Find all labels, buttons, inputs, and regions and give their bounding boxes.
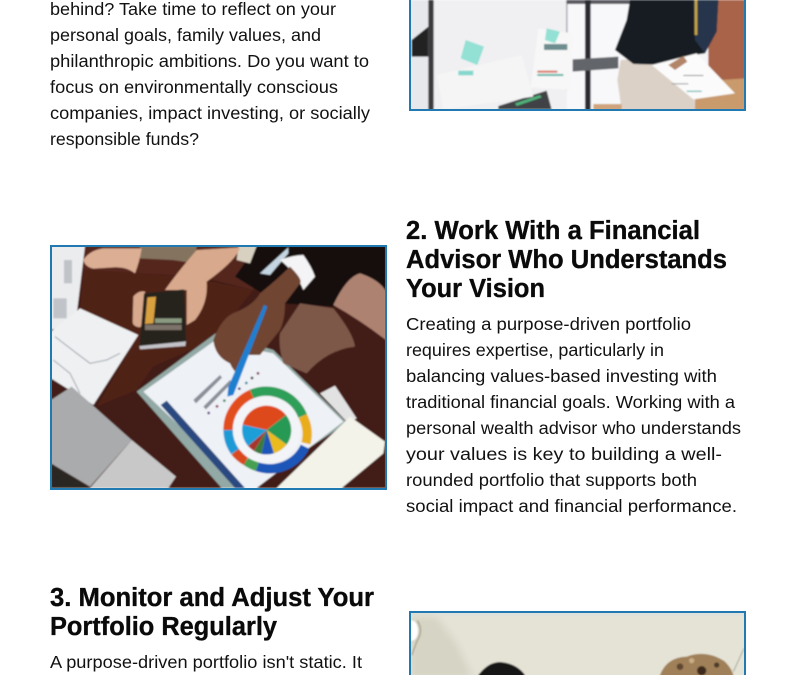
photo frame (51, 246, 386, 489)
text block: step 2 paragraph (406, 314, 741, 516)
right arm sleeve (260, 247, 288, 275)
paper in hand (652, 53, 735, 99)
legend text dots (193, 375, 232, 409)
jacket (615, 0, 718, 65)
chart sheet (51, 308, 138, 405)
text block: step 2 paragraph: traditional financial goals. Working with a (406, 392, 735, 412)
right side cushion / chair (280, 303, 355, 373)
text block: step 1 paragraph: responsible funds? (50, 129, 199, 149)
phone holding arm (165, 247, 240, 325)
donut chart (228, 391, 307, 469)
photo: two people in front of a pale wall (406, 612, 745, 675)
text block: step 1 paragraph (50, 0, 370, 149)
white papers bottom right (320, 386, 357, 423)
pen (227, 305, 267, 397)
photo frame (410, 0, 745, 110)
document top-left (51, 246, 85, 329)
curly hair (660, 654, 734, 675)
text block: step 1 paragraph: focus on environmentally conscious (50, 77, 338, 97)
text block: step 2 paragraph: balancing values-based investing with (406, 366, 717, 386)
text block: step 2 paragraph: rounded portfolio that supports both (406, 470, 697, 490)
brick wall (708, 0, 745, 82)
laptop (51, 387, 132, 487)
text block: step 2 paragraph: personal wealth advisor who understands (406, 418, 741, 438)
heading: step 3 (50, 584, 374, 641)
photo frame (410, 612, 745, 675)
writing hand (213, 267, 301, 375)
heading: step 2: Your Vision (406, 275, 545, 303)
clipboard (137, 333, 346, 488)
dark hair (478, 662, 525, 675)
text block: step 1 paragraph: philanthropic ambitions. Do you want to (50, 51, 369, 71)
trousers (617, 57, 695, 110)
heading: step 3: Portfolio Regularly (50, 613, 278, 641)
text block: step 2 paragraph: requires expertise, particularly in (406, 340, 664, 360)
photo: advisor presenting at whiteboard (410, 0, 745, 110)
text block: step 3 paragraph: A purpose-driven portfolio isn't static. It (50, 652, 362, 672)
heading: step 2: Advisor Who Understands (406, 246, 727, 274)
text block: step 1 paragraph: companies, impact investing, or socially (50, 103, 370, 123)
phone (139, 289, 186, 349)
text block: step 2 paragraph: your values is key to building a well- (406, 444, 722, 464)
photo: hands reviewing a financial chart on a table (51, 246, 386, 489)
left hand top (83, 248, 142, 273)
text block: step 2 paragraph: Creating a purpose-driven portfolio (406, 314, 691, 334)
text block: step 2 paragraph: social impact and financial performance. (406, 496, 737, 516)
heading: step 3: 3. Monitor and Adjust Your (50, 584, 374, 612)
heading: step 2: 2. Work With a Financial (406, 217, 700, 245)
sheet on board (522, 94, 534, 99)
text block: step 1 paragraph: personal goals, family values, and (50, 25, 321, 45)
heading: step 2 (406, 217, 727, 303)
